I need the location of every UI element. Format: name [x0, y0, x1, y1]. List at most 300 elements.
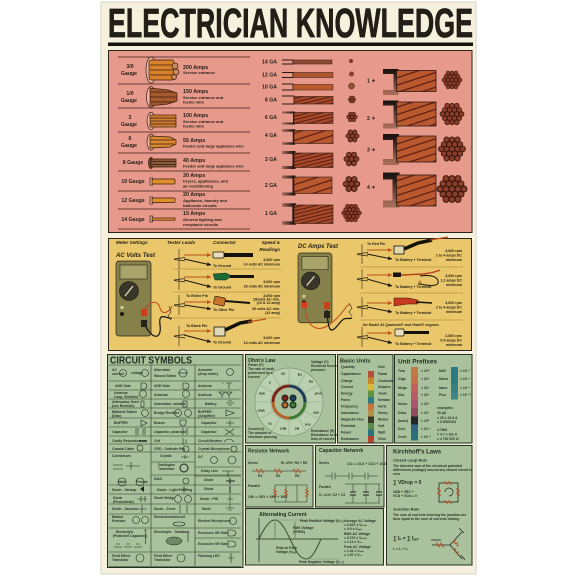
AC voltage notes — [344, 519, 376, 557]
closed loop rule: ∑ VDrop = 0 — [393, 480, 422, 486]
amperage text: air conditioning — [183, 184, 214, 188]
prefix labels: = 25 x 10-6 A — [437, 416, 458, 420]
prefix labels: Mega — [398, 386, 407, 390]
prefix labels: × 10⁻¹ — [421, 427, 431, 431]
amperage text: 55 Amps — [183, 138, 205, 144]
AC test row 1: 14 volts AC minimum — [244, 262, 280, 266]
DC test row 1: minimum — [446, 258, 462, 262]
Ohm's notes: Resistance (R) — [311, 429, 335, 433]
prefix labels: Centi — [398, 435, 407, 439]
sine wave chart: (VRMS) — [293, 530, 305, 534]
column 3 symbols: Flashing LED — [198, 554, 220, 558]
prefix labels: 25 μA — [437, 411, 447, 415]
gauge labels: 14 Gauge — [121, 217, 145, 223]
GA labels: 8 GA — [265, 98, 277, 104]
AC test row 2 — [174, 270, 280, 290]
AC test row 3: 28volts AC min. — [253, 298, 280, 302]
unit names: Hertz — [378, 404, 387, 408]
column 2 symbols: Darlington — [158, 463, 175, 467]
column headers: Speed & — [262, 240, 281, 245]
column 3 symbols: Capacitor — [201, 421, 217, 425]
DC test row 4: minimum — [446, 343, 462, 347]
column 1 symbols: voltage — [131, 371, 143, 375]
amperage text: feeder wire — [183, 100, 205, 104]
DC test row 2: To Battery + Terminal — [395, 285, 431, 289]
column 2 symbols — [154, 368, 192, 562]
parallel resistors — [248, 484, 308, 502]
heading: circuit symbols: CIRCUIT SYMBOLS — [110, 356, 192, 366]
Ohm's notes: The rate of work — [248, 367, 274, 371]
junction rule: Junction Rule — [393, 506, 420, 512]
parallel resistors: Parallel — [248, 484, 260, 488]
prefix labels: × 10⁰ — [421, 419, 430, 423]
series resistors — [248, 461, 307, 478]
panel: Ohm's law — [246, 354, 340, 443]
heading: DC Amps Test: DC Amps Test — [298, 243, 339, 250]
series resistors: R3 — [295, 474, 299, 478]
parallel capacitors: Parallel — [319, 485, 331, 489]
DC multimeter — [298, 253, 352, 330]
Ohm's wheel: P/V — [305, 423, 311, 427]
amperage text — [183, 65, 244, 227]
unit names: Resistance — [341, 437, 359, 441]
amperage text: 200 Amps — [183, 65, 208, 71]
prefix labels: × 10⁻⁹ — [460, 386, 470, 390]
heading: alternating current: Alternating Current — [259, 512, 307, 518]
AC test row 4: To Ground — [213, 340, 231, 344]
GA labels: 3 GA — [265, 157, 277, 163]
column 1 symbols: AND Gate — [115, 384, 131, 388]
column 1 symbols: Diode - Varactor — [112, 507, 139, 511]
AC test row 4 — [174, 319, 280, 346]
AC test row 2: 3,600 rpm — [263, 280, 280, 284]
unit names: Ohm — [378, 437, 386, 441]
unit names: Farad — [378, 372, 387, 376]
DC test row 2: 1.2 amps DC — [440, 278, 462, 282]
DC test row 3: minimum — [446, 310, 462, 314]
column 1 symbols: Resistor — [112, 519, 126, 523]
column 2 symbols: Buzzer — [154, 421, 166, 425]
large gauge labels — [367, 78, 376, 191]
DC test row 4: for Model 32 Quantum® and Vtwin® engines — [363, 323, 439, 327]
DC test row 4 — [357, 323, 462, 347]
heading: Kirchhoff's laws: Kirchhoff's Laws — [393, 450, 442, 456]
column 3 symbols: DC — [198, 455, 203, 459]
column 3 symbols: BUFFER — [198, 410, 212, 414]
column 3 symbols: Diode — [204, 478, 214, 482]
column 2 symbols: AND Gate — [154, 384, 170, 388]
AC voltage notes: RMS AC Voltage — [344, 532, 370, 536]
column 3 symbols: Diode — [204, 487, 214, 491]
DC row dividers — [360, 267, 463, 320]
prefix labels: Pico — [439, 393, 446, 397]
column 1 symbols: Transistor — [112, 558, 129, 562]
gauge labels: 6 — [129, 136, 132, 142]
Ohm's wheel: R·I — [298, 373, 302, 377]
DC test row 2 — [357, 269, 462, 289]
junction rule — [393, 506, 466, 560]
column headers: Tester Leads — [167, 240, 196, 245]
Ohm's wheel: I²R — [295, 427, 300, 431]
AC voltage notes: = 1.11 x Vₐᵥ — [344, 540, 363, 544]
prefix labels: = 4 700 000 Ω — [437, 437, 459, 441]
column 1 symbols: (Polarized Capacitor) — [113, 534, 147, 538]
Ohm's wheel: I² — [269, 381, 272, 385]
heading: unit prefixes: Unit Prefixes — [398, 358, 438, 366]
column 2 symbols: Antenna — [154, 393, 168, 397]
AC test row 3 — [174, 294, 281, 315]
AC test row 2: To Ground — [213, 286, 231, 290]
panel: wire gauges — [108, 50, 472, 232]
gauge labels: 1/0 — [126, 91, 134, 97]
unit names: Unit — [378, 365, 385, 369]
column 3 symbols: Antenna — [198, 384, 212, 388]
prefix labels: = 4.7 x 10e 6 — [437, 432, 457, 436]
AC test row 3: 3,600 rpm — [263, 294, 280, 298]
prefix labels: × 10⁻¹² — [460, 393, 472, 397]
Ohm's notes: Resistance to the — [311, 433, 339, 437]
Ohm's notes: pressure — [311, 368, 325, 372]
AC test row 3: To Other Pin — [213, 308, 234, 312]
Ohm's notes: performed by a — [248, 371, 273, 375]
Ohm's notes — [248, 360, 340, 441]
Ohm's notes: flow of current — [311, 437, 335, 441]
heading: capacitor network: Capacitor Network — [319, 448, 363, 454]
Ohm's notes: Electrical force or — [311, 364, 340, 368]
column 2 symbols: Transistor — [154, 558, 171, 562]
Ohm's notes: The amount of — [248, 431, 272, 435]
unit names: Capacitance — [341, 372, 361, 376]
closed loop rule: VAB + VBC + — [393, 490, 414, 494]
large gauge labels: 3 ✦ — [367, 148, 376, 154]
AC test row 3: (16 amp) — [265, 311, 281, 315]
prefix labels: × 10⁻² — [421, 435, 431, 439]
amperage text: Dryers, appliances, and — [183, 178, 228, 184]
heading: resistor network: Resistor Network — [248, 448, 289, 454]
column 1 symbols: Cavity Resonator — [112, 439, 141, 443]
column 1 symbols: Capacitor — [112, 430, 128, 434]
prefix labels: × 10⁶ — [421, 386, 430, 390]
unit names: Force — [341, 398, 350, 402]
unit names: Quantity — [341, 365, 355, 369]
column 2 symbols: Diode - Zener — [154, 507, 176, 511]
parallel capacitors — [319, 484, 382, 503]
AC voltage notes: = 0.9 x Vᵣₘₛ — [344, 527, 363, 531]
prefix labels: (base) — [398, 419, 408, 423]
junction rule: thus equal to the sum of currents leaving — [393, 517, 459, 521]
DC test row 4: To Battery + Terminal — [395, 342, 431, 346]
panel: volts and amps tests — [108, 237, 472, 350]
column headers — [116, 240, 281, 252]
parallel capacitors: Cₜ =C1+ C2 + C3 — [319, 493, 345, 497]
heading: AC Volts Test: AC Volts Test — [115, 252, 156, 259]
amperage text: 15 Amps — [183, 211, 205, 217]
panel: capacitor network — [316, 446, 386, 507]
junction rule: ∑ Iₙ = ∑ Iₒᵤₜ — [393, 536, 419, 542]
sine wave chart: Peak Positive Voltage (Vₚ₊) — [300, 519, 344, 523]
column 1 symbols: Female — [136, 480, 148, 484]
prefix labels — [398, 369, 472, 441]
AC test row 4: 3,600 rpm — [263, 336, 280, 340]
DC test row 1: 3,600 rpm — [445, 249, 462, 253]
Ohm's wheel: V/R — [313, 411, 319, 415]
Ohm's notes: Voltage (V) — [311, 360, 328, 364]
panel: basic units — [338, 354, 393, 443]
title rule — [108, 42, 473, 46]
Ohm's notes: Current (I) — [248, 427, 264, 431]
wire bundle icons — [146, 57, 179, 222]
amperage text: Service entrance — [183, 70, 216, 75]
column 2 symbols: Alternator — [154, 368, 171, 372]
amperage text: General lighting and — [183, 217, 222, 222]
amperage text: feeder wire — [183, 124, 205, 128]
column 2 symbols: CRO - Cathode Ray — [154, 447, 185, 451]
unit names: Power — [341, 430, 352, 434]
Ohm's wheel — [255, 368, 323, 436]
GA labels: 14 GA — [262, 60, 277, 66]
column 2 symbols: Electrolyte - Tantalum — [154, 530, 189, 534]
column 2 symbols: Crystal — [160, 454, 172, 458]
column 2 symbols: Cell — [154, 439, 160, 443]
large cross sections — [437, 71, 467, 202]
unit names: Newton — [378, 398, 390, 402]
GA labels: 2 GA — [265, 183, 277, 189]
column 3 symbols — [198, 368, 237, 563]
gauge labels: 12 Gauge — [121, 198, 145, 204]
unit names: Henry — [378, 411, 388, 415]
closed loop rule: The directed sum of the electrical potential — [393, 464, 462, 468]
unit names: Energy — [341, 392, 353, 396]
column 2 symbols: Diode - Light Emitting — [157, 488, 192, 492]
large terminals — [383, 70, 436, 206]
amperage text: Service entrance and — [183, 119, 224, 124]
amperage text: 20 Amps — [183, 192, 205, 198]
column 1 symbols: (see Resistor) — [112, 404, 134, 408]
column headers: Connector — [213, 240, 236, 245]
column 2 symbols: Bridge Rectifier — [154, 411, 180, 415]
prefix labels: × 10⁻⁶ — [460, 377, 470, 381]
prefix swatches — [411, 367, 458, 440]
column 1 symbols: BUFFER — [114, 421, 128, 425]
prefix labels: Nano — [439, 386, 447, 390]
closed loop rule — [393, 458, 472, 504]
AC test row 1: To Ground — [213, 264, 231, 268]
AC test row 2: 28 volts AC minimum — [244, 284, 280, 288]
prefix labels: × 10⁹ — [421, 377, 430, 381]
AC test row 3: 30 volts AC min. — [252, 307, 280, 311]
prefix labels: = 0.0000254 — [437, 420, 456, 424]
unit names: Joule — [378, 392, 387, 396]
prefix labels: Milli — [439, 369, 446, 373]
closed loop rule: VCD + VDA = 0 — [393, 494, 417, 498]
prefix labels: examples: — [437, 406, 454, 410]
column 1 symbols: Diode - Varicap — [112, 488, 136, 492]
panel: alternating current — [246, 508, 384, 565]
column 1 symbols: (Diac) — [112, 414, 121, 418]
column 1 symbols: Antenna — [114, 391, 128, 395]
gauge labels: 3 — [129, 115, 132, 121]
column 1 symbols: (Photodiode) — [113, 500, 134, 504]
gauge labels: 3/0 — [126, 64, 134, 70]
prefix labels: Tera — [398, 369, 405, 373]
column 3 symbols: Antenna — [198, 393, 212, 397]
unit names: Magnetic Flux — [341, 418, 364, 422]
column 1 symbols: Coaxial Cable — [112, 447, 134, 451]
amperage text: Appliance, laundry and — [183, 198, 228, 203]
closed loop rule: differences (voltage) around any closed circuit is — [393, 468, 472, 472]
series resistors: R2 — [276, 474, 280, 478]
amperage text: 100 Amps — [183, 113, 208, 119]
column 2 symbols: Electroluminescent — [154, 515, 186, 519]
closed loop rule: zero — [393, 472, 400, 476]
AC voltage notes: = 0.637 x Vₚₑₐₖ — [344, 523, 367, 527]
parallel resistors: 1/Rₜ = 1/R1 + 1/R2 + 1/R3 — [248, 495, 287, 499]
panel: circuit symbols — [108, 354, 243, 568]
prefix labels: × 10² — [421, 402, 430, 406]
column 1 symbols: Male — [118, 480, 126, 484]
unit names: Charge — [341, 379, 353, 383]
prefix labels: Kilo — [398, 393, 404, 397]
column 3 symbols: (Amplifier) — [198, 414, 215, 418]
heading: basic units: Basic Units — [340, 358, 370, 364]
Ohm's wheel: √P/R — [257, 409, 265, 413]
column 1 symbols: Connectors — [112, 454, 131, 458]
gauge labels: 10 Gauge — [121, 179, 145, 185]
unit names: Weber — [378, 418, 389, 422]
AC voltage notes: = 1.41 x Vᵣₘₛ — [344, 549, 365, 553]
column 3 symbols: Electret Microphone — [198, 519, 231, 523]
AC test row 4: 14 volts AC minimum — [244, 341, 280, 345]
DC test row 1: 2 to 4 amps DC — [436, 254, 462, 258]
AC test row 3: (10 & 12 amp) — [257, 301, 281, 305]
large gauge labels: 1 ✦ — [367, 78, 376, 84]
column 3 symbols: Circuit Breaker — [198, 439, 223, 443]
amperage text: Service entrance and — [183, 95, 224, 100]
Ohm's wheel: P/I — [309, 380, 313, 384]
prefix labels: Micro — [439, 377, 448, 381]
Ohm's notes: electrons passing — [248, 435, 277, 439]
column 3 symbols: Delay Line — [201, 469, 218, 473]
panel: unit prefixes — [394, 354, 472, 443]
unit names: Inductance — [341, 411, 359, 415]
poster background — [101, 2, 476, 574]
unit names: Potential — [341, 424, 355, 428]
DC test row 3: 3,600 rpm — [445, 301, 462, 305]
DC test row 4: 0.5 amps DC — [440, 338, 462, 342]
heading: Ohm's Law: Ohm's Law — [248, 358, 276, 364]
column 3 symbols: Battery — [205, 402, 217, 406]
column 3 symbols: (Amp meter) — [198, 372, 218, 376]
AC test row 4: To Black Pin — [186, 324, 207, 328]
gauge labels: Gauge — [121, 143, 137, 149]
junction rule: I₁ = I₂ + I₃ — [393, 547, 408, 551]
prefix labels: × 10¹ — [421, 411, 430, 415]
amperage text: 30 Amps — [183, 173, 205, 179]
prefix labels: × 10¹² — [421, 369, 431, 373]
unit names: Volt — [378, 424, 385, 428]
GA labels — [262, 60, 277, 217]
column 1 symbols: Bilateral Switch — [112, 410, 137, 414]
prefix labels: × 10⁻³ — [460, 369, 470, 373]
closed loop rule: Closed Loop Rule — [393, 458, 428, 462]
column 3 symbols: Exclusive OR Gate — [198, 542, 228, 546]
junction rule: The sum of currents entering the junction are — [393, 513, 466, 517]
column 2 symbols: Field Effect — [154, 554, 173, 558]
GA labels: 12 GA — [262, 72, 277, 78]
column headers: Readings — [259, 247, 280, 252]
sine wave chart: Voltage (Vₚₚ) — [276, 550, 296, 554]
Ohm's wheel: V·I — [268, 422, 272, 426]
DC test row 3 — [357, 297, 462, 317]
series resistors: Rₜ =R1+ R2 + R3 — [281, 461, 307, 465]
unit names — [341, 365, 393, 441]
AC voltage notes: = 0.707 x Vₚₑₐₖ — [344, 536, 367, 540]
prefix labels: Hecto — [398, 402, 407, 406]
column 3 symbols: Earth — [202, 507, 211, 511]
gauge labels: Gauge — [121, 71, 137, 77]
AC row dividers — [173, 269, 281, 318]
DC test row 2: minimum — [446, 283, 462, 287]
Ohm's notes: current — [248, 375, 261, 379]
large gauge labels: 4 ✦ — [367, 185, 376, 191]
column 2 symbols: Diode Bridge — [154, 496, 175, 500]
AC multimeter — [116, 261, 172, 336]
column 2 symbols: Capacitor, polarized — [154, 430, 186, 434]
series capacitors: 1/Cₜ = 1/C1 + 1/C2 + 1/C3 — [347, 462, 386, 466]
GA labels: 6 GA — [265, 115, 277, 121]
series capacitors — [319, 461, 386, 480]
series resistors: Series — [248, 461, 258, 465]
large gauge labels: 2 ✦ — [367, 116, 376, 122]
AC voltage notes: Average AC Voltage — [344, 519, 376, 523]
amperage text: bathroom circuits — [183, 203, 218, 208]
sine wave chart — [256, 518, 344, 564]
amperage text: 150 Amps — [183, 89, 208, 95]
column 2 symbols: DIAC — [154, 477, 163, 481]
column 1 symbols: Field Effect — [112, 554, 131, 558]
column 1 symbols: Attenuator, fixed — [112, 400, 139, 404]
unit names: Frequency — [341, 404, 358, 408]
AC test row 1: 3,600 rpm — [263, 258, 280, 262]
gauge labels: Gauge — [121, 122, 137, 128]
DC test row 1: To Red Pin — [367, 242, 386, 246]
prefix labels: 4.7MΩ — [437, 428, 448, 432]
AC voltage notes: Peak AC Voltage — [344, 545, 371, 549]
Ohm's wheel: V/I — [281, 372, 285, 376]
series capacitors: Series — [319, 461, 329, 465]
DC test row 3: 2 to 4 amps DC — [436, 306, 462, 310]
column 1 symbols: current — [112, 372, 125, 376]
column 3 symbols: Diode - PIN — [200, 497, 219, 501]
column 3 symbols: Ammeter — [198, 368, 213, 372]
unit names: Current — [341, 385, 354, 389]
column 1 symbols: Ballast — [112, 515, 124, 519]
column 1 symbols: Loop, Shielded — [114, 395, 138, 399]
series resistors: R1 — [258, 474, 262, 478]
column 3 symbols: Crystal Microphone — [198, 447, 230, 451]
small terminals — [282, 60, 333, 224]
column headers: Meter Settings — [116, 240, 148, 245]
DC test row 1 — [357, 237, 462, 264]
column 1 symbols: AC — [112, 368, 117, 372]
DC test row 4: 2,800 rpm — [445, 334, 462, 338]
Ohm's notes: Power (P) — [248, 363, 264, 367]
column 1 symbols: Diode — [113, 496, 123, 500]
prefix labels: Giga — [398, 377, 406, 381]
column 1 symbols — [112, 368, 148, 562]
DC test row 3: To Battery + Terminal — [395, 311, 431, 315]
AC test row 1 — [174, 249, 280, 269]
